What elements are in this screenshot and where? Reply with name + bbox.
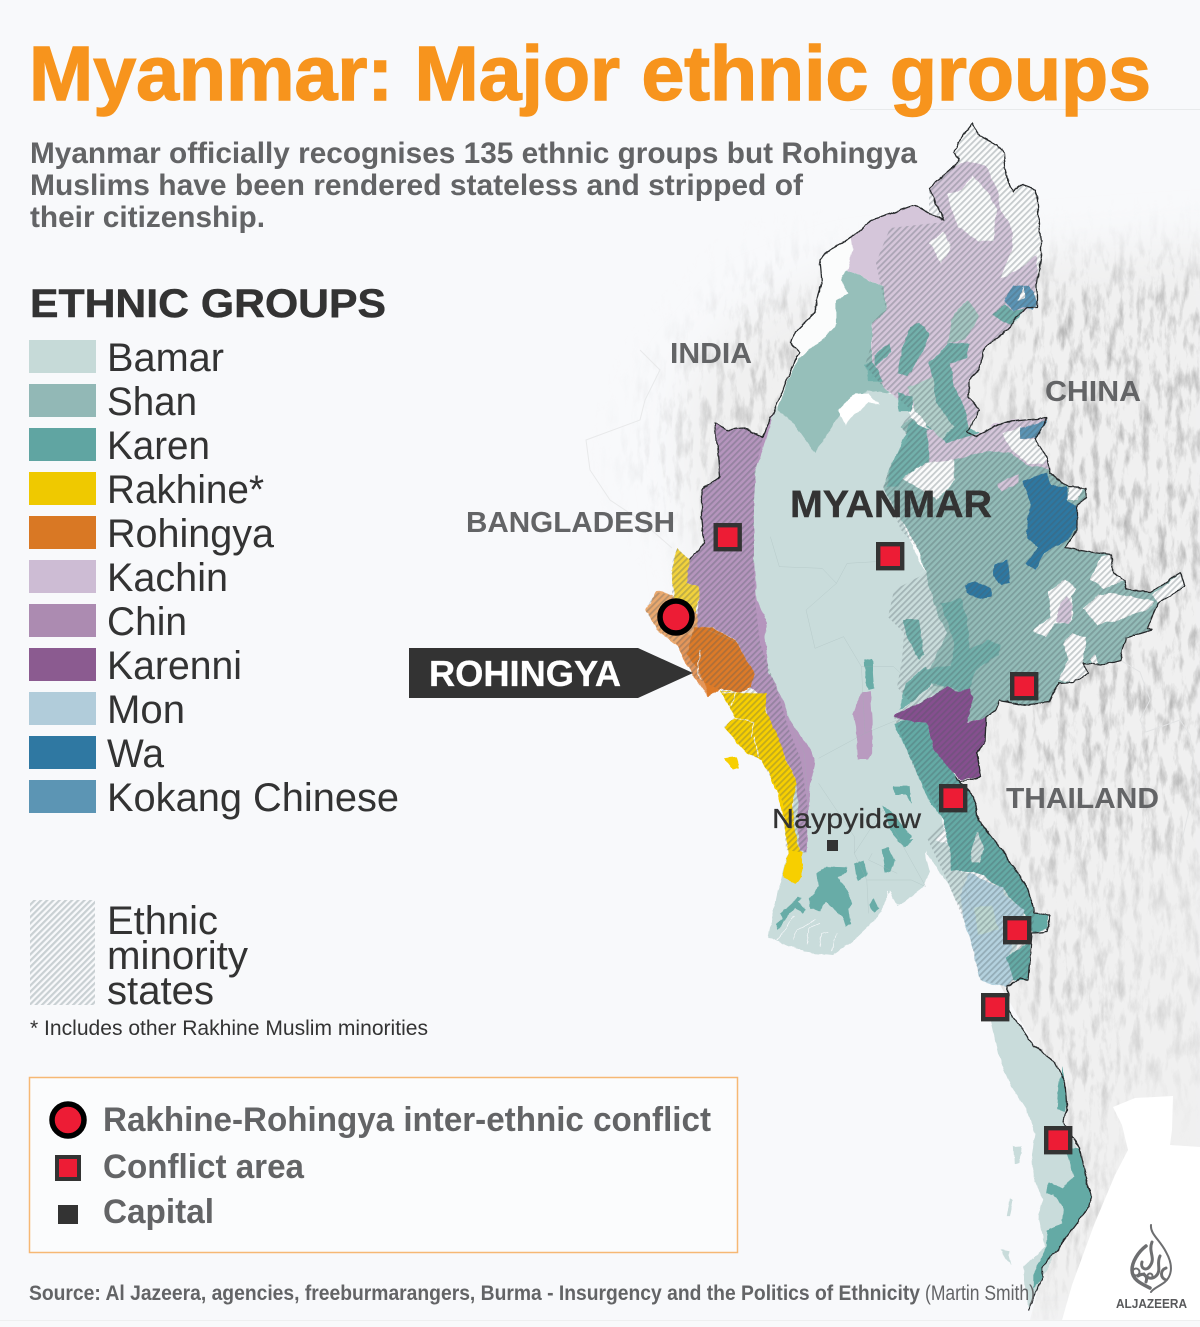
legend item: Karenni <box>29 644 242 688</box>
region: Chin <box>686 407 815 853</box>
coastal inlets <box>676 643 758 757</box>
intro text: Muslims have been rendered stateless and stripped of <box>30 169 804 202</box>
key text: conflict area: Conflict area <box>103 1148 305 1186</box>
legend item: Mon: Mon <box>107 688 185 732</box>
region: Tanintharyi Bamar <box>990 1013 1083 1310</box>
region: Shan east block <box>883 418 1185 723</box>
thin administrative boundaries <box>708 537 997 937</box>
country label: Thailand: THAILAND <box>1006 783 1159 815</box>
legend item: Kachin: Kachin <box>107 556 228 600</box>
key icon: capital square <box>58 1205 78 1224</box>
key icon: conflict square <box>57 1157 79 1179</box>
callout: Rohingya arrow: ROHINGYA <box>429 653 621 694</box>
eastern blank and Karen patches <box>899 555 1185 717</box>
Kachin band in north Shan <box>902 418 1050 500</box>
region: Kachin <box>847 160 1037 427</box>
legend item: Rakhine <box>29 468 264 512</box>
legend item: Rohingya: Rohingya <box>107 512 275 556</box>
ethnic minority states hatching <box>640 110 1200 1000</box>
region: Tanintharyi Karen <box>1033 1067 1093 1290</box>
legend item: Bamar: Bamar <box>107 336 224 380</box>
Myanmar border <box>690 124 1185 1310</box>
source line: (Martin Smith) <box>925 1282 1035 1305</box>
legend item: Kokang Chinese: Kokang Chinese <box>107 776 399 820</box>
region: Rakhine north <box>672 548 699 617</box>
legend: ethnic minority states <box>30 899 248 1013</box>
legend item: Karen <box>29 424 210 468</box>
region: Karenni <box>894 687 986 780</box>
capital label: Naypyidaw: Naypyidaw <box>772 803 922 834</box>
key icon: conflict circle <box>52 1104 84 1136</box>
legend item: Wa: Wa <box>107 732 165 776</box>
legend: ethnic minority states: minority <box>107 934 248 978</box>
conflict area markers <box>716 525 1070 1152</box>
legend item: Mon <box>29 688 185 732</box>
legend item: Wa <box>29 732 165 776</box>
region: Karen central patches <box>776 840 913 929</box>
country label: India: INDIA <box>670 338 752 370</box>
icon: Al Jazeera logo <box>1116 1225 1188 1311</box>
legend item: Kachin <box>29 556 228 600</box>
region: Rakhine south <box>720 690 802 883</box>
region: Karen south <box>894 720 1049 933</box>
white lake area <box>838 393 879 425</box>
legend heading: ETHNIC GROUPS <box>30 282 386 326</box>
source line: Source: Al Jazeera, agencies, freeburmarangers, Burma - Insurgency and the Politics of Ethnicity <box>29 1282 920 1305</box>
land base <box>763 124 1086 780</box>
legend item: Karen: Karen <box>107 424 210 468</box>
intro text: their citizenship. <box>30 201 265 234</box>
footnote: * Includes other Rakhine Muslim minorities <box>30 1017 428 1040</box>
key text: inter-ethnic conflict: Rakhine-Rohingya inter-ethnic conflict <box>103 1101 711 1139</box>
blank areas in Kachin <box>929 175 997 263</box>
region: Wa and Kokang <box>965 285 1083 598</box>
legend item: Karenni: Karenni <box>107 644 242 688</box>
region: Bamar patch near Karen <box>970 832 985 863</box>
region: Shan north-west <box>777 270 890 453</box>
intro text <box>30 137 917 234</box>
logo wordmark: ALJAZEERA <box>1116 1296 1188 1311</box>
title: Myanmar: Major ethnic groups <box>29 31 1151 117</box>
Delta inlets <box>777 890 903 952</box>
key text: capital: Capital <box>103 1193 214 1231</box>
legend: ethnic minority states: Ethnic <box>107 899 218 943</box>
country label: Bangladesh: BANGLADESH <box>466 507 675 539</box>
legend: ethnic groups <box>29 336 399 820</box>
region: Mon <box>960 873 1024 988</box>
region: Karen and Chin mid patches <box>853 658 911 847</box>
legend item: Rohingya <box>29 512 275 556</box>
legend item: Rakhine: Rakhine* <box>107 468 264 512</box>
legend item: Shan: Shan <box>107 380 197 424</box>
legend item: Chin <box>29 600 187 644</box>
panel: symbol key <box>30 1078 738 1252</box>
country label: China: CHINA <box>1045 376 1141 408</box>
north Shan and Karen strands <box>865 300 1024 487</box>
region: Bamar central <box>740 385 1024 987</box>
legend item: Chin: Chin <box>107 600 187 644</box>
callout: Rohingya arrow <box>409 648 693 698</box>
region: Karen islet and Mon border <box>1007 942 1030 980</box>
legend item: Bamar <box>29 336 224 380</box>
legend item: Shan <box>29 380 197 424</box>
country label: Myanmar: MYANMAR <box>790 484 992 526</box>
region: Rohingya <box>645 592 754 697</box>
Rakhine-Rohingya conflict marker <box>660 601 692 633</box>
intro text: Myanmar officially recognises 135 ethnic groups but Rohingya <box>30 137 917 170</box>
legend: ethnic minority states: states <box>107 969 214 1013</box>
capital marker <box>827 840 838 851</box>
map: ethnic regions of Myanmar <box>645 124 1185 1310</box>
